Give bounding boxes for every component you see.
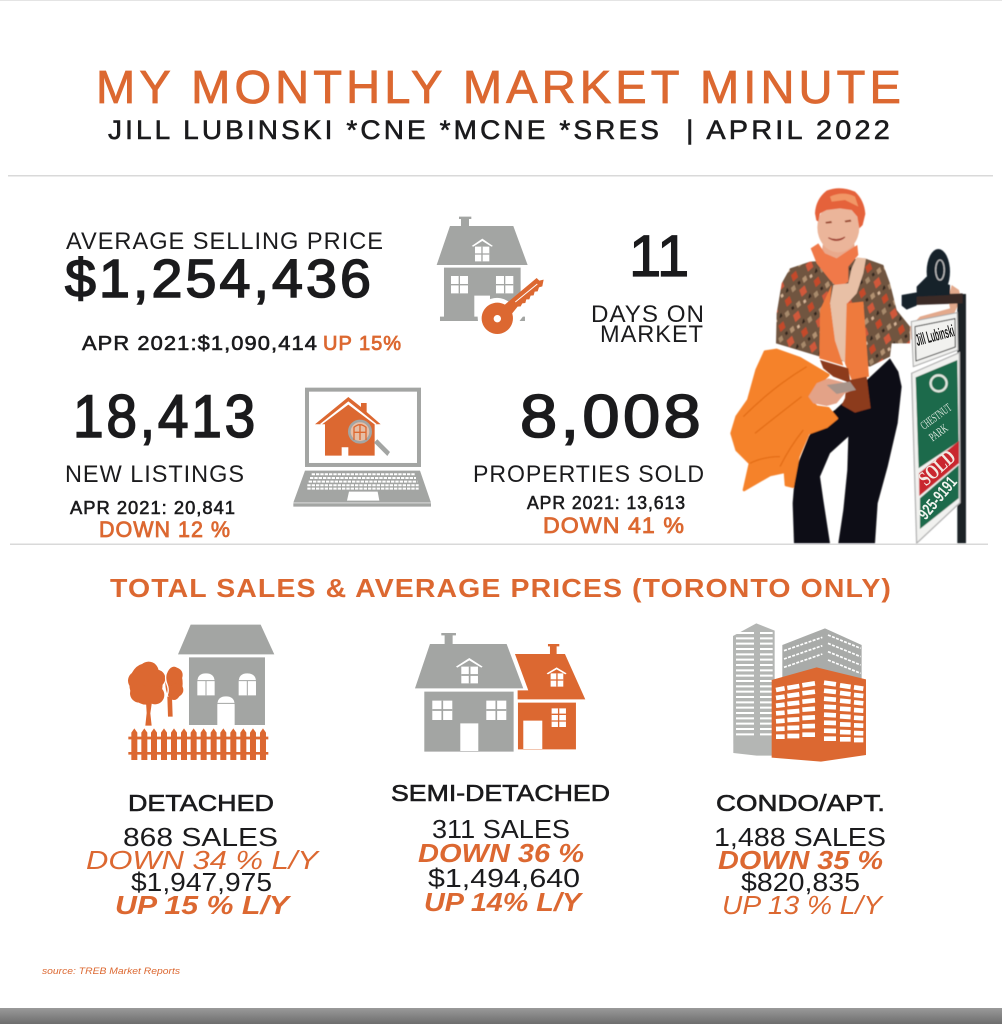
stat: new listings: 18,413 [73, 383, 258, 450]
stat: properties sold: APR 2021: 13,613 [527, 492, 686, 513]
stat: new listings [65, 383, 258, 542]
stat: average selling price: APR 2021:$1,090,414 [82, 333, 318, 355]
stat: new listings: APR 2021: 20,841 [70, 497, 236, 518]
label: condo stats [714, 790, 886, 920]
icon: laptop with house search [293, 390, 431, 507]
sign text [913, 321, 961, 523]
label: detached stats: DOWN 34 % L/Y [86, 845, 320, 875]
title: MY MONTHLY MARKET MINUTE [96, 61, 905, 113]
source note: source: TREB Market Reports [42, 966, 180, 977]
label: detached stats: $1,947,975 [131, 867, 272, 897]
label: semi-detached stats: DOWN 36 % [418, 838, 584, 868]
stat: days on market: 11 [629, 224, 689, 289]
label: detached stats: DETACHED [128, 790, 274, 816]
label: semi-detached stats: 311 SALES [432, 814, 570, 844]
icon: semi-detached houses [415, 633, 585, 752]
stat: days on market: DAYS ON [591, 301, 705, 328]
label: detached stats: 868 SALES [123, 822, 278, 852]
stat: average selling price: UP 15% [323, 333, 402, 355]
section heading: TOTAL SALES & AVERAGE PRICES (TORONTO ONLY) [110, 573, 892, 603]
label: condo stats: $820,835 [741, 867, 860, 897]
label: detached stats [86, 790, 320, 920]
label: condo stats: 1,488 SALES [714, 822, 886, 852]
sign text: PARK [926, 421, 951, 444]
subtitle: | APRIL 2022 [686, 115, 893, 145]
stat: new listings: DOWN 12 % [99, 517, 231, 542]
label: condo stats: DOWN 35 % [718, 845, 883, 875]
sign text: CHESTNUT [918, 400, 954, 432]
stat: properties sold: 8,008 [520, 383, 704, 450]
subtitle [108, 115, 893, 145]
label: semi-detached stats: UP 14% L/Y [424, 887, 584, 917]
stat: properties sold: PROPERTIES SOLD [473, 461, 705, 488]
stat: average selling price: $1,254,436 [65, 249, 374, 309]
stat: properties sold [473, 383, 705, 538]
label: semi-detached stats: SEMI-DETACHED [391, 780, 610, 806]
sign text: 925-9191 [914, 473, 961, 523]
stat: new listings: NEW LISTINGS [65, 461, 245, 488]
label: semi-detached stats [391, 780, 610, 917]
label: condo stats: CONDO/APT. [716, 790, 885, 816]
stat: average selling price: AVERAGE SELLING PRICE [66, 228, 384, 255]
photo: agent with sold sign [732, 188, 966, 543]
icon: house with key [437, 217, 544, 337]
sign text: SOLD [915, 446, 960, 490]
label: condo stats: UP 13 % L/Y [722, 890, 884, 920]
stat: properties sold: DOWN 41 % [543, 513, 685, 538]
label: detached stats: UP 15 % L/Y [115, 890, 292, 920]
stat: days on market: MARKET [600, 321, 704, 348]
subtitle: JILL LUBINSKI *CNE *MCNE *SRES [108, 115, 662, 145]
icon: condo towers [733, 623, 866, 762]
icon: detached house [128, 625, 274, 760]
label: semi-detached stats: $1,494,640 [428, 863, 580, 893]
stat: average selling price [65, 228, 402, 355]
stat: days on market [591, 224, 705, 348]
